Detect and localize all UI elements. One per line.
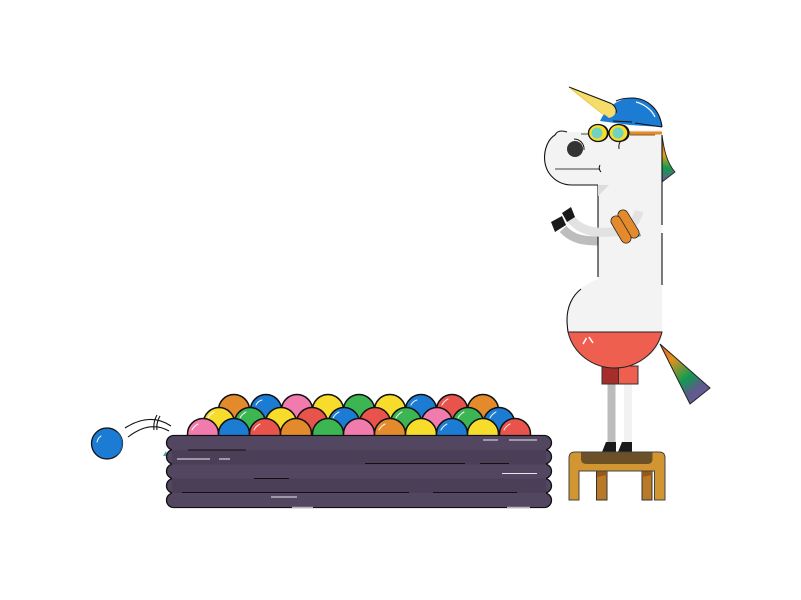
far arm — [563, 229, 600, 241]
body outlines — [567, 135, 662, 332]
cushion roll bodies — [172, 436, 546, 507]
stool seat — [581, 452, 652, 464]
ball pit balls — [188, 394, 530, 450]
near hoof — [562, 207, 575, 222]
stool — [569, 452, 665, 500]
back row of balls — [218, 394, 498, 426]
cushion: ball pit wall — [163, 436, 552, 508]
hooves — [602, 442, 616, 452]
head — [544, 131, 598, 185]
shorts legs — [602, 366, 638, 384]
horn — [569, 87, 616, 118]
mane — [662, 135, 675, 182]
shorts — [568, 332, 662, 368]
cap — [600, 98, 662, 127]
unicorn — [544, 87, 710, 452]
cushion roll ends — [166, 436, 552, 508]
hot dog holder — [616, 215, 641, 238]
stool frame — [569, 452, 665, 500]
goggles — [588, 124, 629, 142]
mouth — [555, 168, 600, 170]
tail — [660, 344, 710, 404]
near arm — [571, 211, 639, 232]
cushion detail lines — [178, 436, 537, 492]
shorts highlight — [583, 337, 593, 344]
teal peek behind cushion — [163, 451, 167, 456]
ball highlights — [192, 399, 510, 430]
middle row of balls — [204, 408, 514, 438]
stool back legs — [596, 470, 652, 500]
strap — [629, 132, 662, 134]
body — [567, 130, 662, 368]
flying blue ball — [92, 428, 123, 459]
far hoof — [551, 216, 566, 232]
neck shadow — [598, 185, 609, 196]
motion lines — [125, 415, 171, 437]
eye — [567, 141, 583, 157]
front row of balls — [188, 418, 530, 450]
legs — [608, 384, 616, 442]
